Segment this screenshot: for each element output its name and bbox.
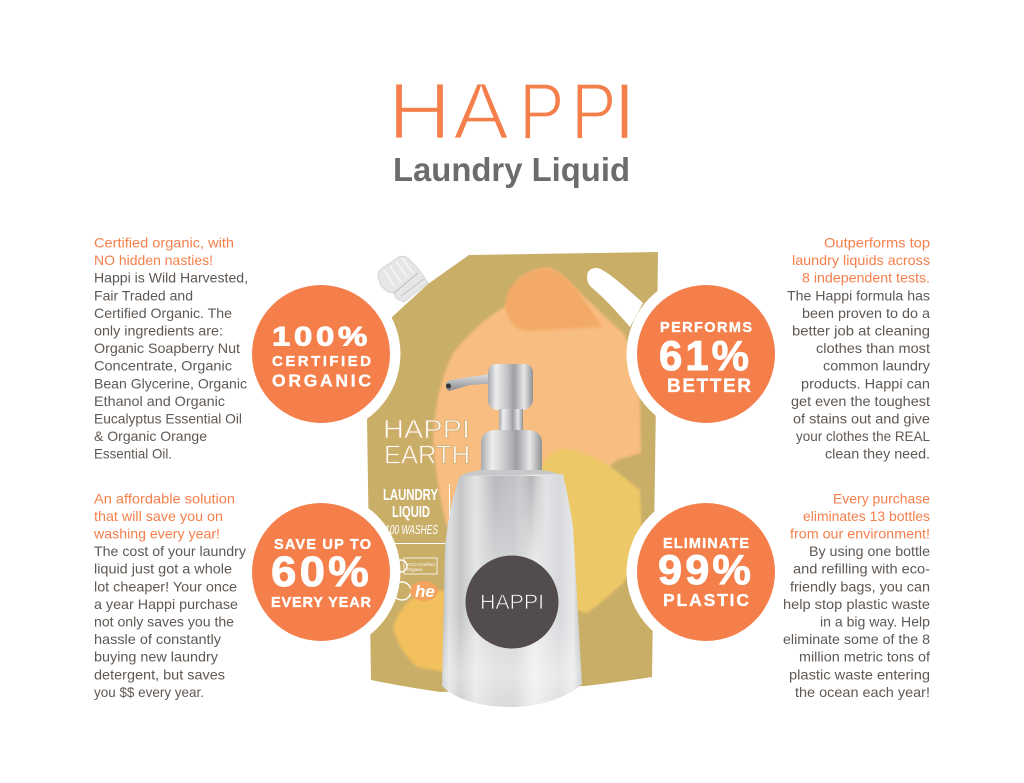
heading (792, 236, 930, 286)
certification badges: he (415, 582, 435, 601)
body: hassle of constantly (94, 632, 221, 647)
body: better job at cleaning (792, 324, 930, 338)
heading (93, 491, 235, 542)
body: Eucalyptus Essential Oil (94, 412, 242, 426)
orange watercolour shape (433, 268, 641, 540)
heading: Outperforms top (824, 236, 930, 250)
body: help stop plastic waste (783, 597, 930, 612)
body: million metric tons of (799, 650, 930, 665)
badge: eliminate 99% plastic: PLASTIC (663, 590, 749, 610)
body: Organic Soapberry Nut (94, 341, 240, 356)
body: liquid just got a whole (94, 562, 232, 577)
heading: from our environment! (790, 526, 930, 542)
heading: NO hidden nasties! (94, 253, 213, 268)
product image: refill pouch (367, 252, 658, 692)
lower-left yellow shape (393, 590, 445, 672)
body: you $$ every year. (94, 685, 204, 700)
badge: eliminate 99% plastic (626, 492, 786, 652)
title: HAPPI: I (612, 67, 636, 157)
body: clean they need. (825, 447, 930, 462)
infographic canvas (94, 84, 930, 707)
bottle flange (460, 470, 564, 480)
body (94, 271, 248, 462)
badge: save up to 60% every year: SAVE UP TO (274, 537, 371, 553)
pouch cap (378, 256, 428, 302)
bottle highlight (442, 474, 582, 707)
body (787, 288, 930, 462)
body: the ocean each year! (795, 685, 930, 700)
body: a year Happi purchase (94, 597, 238, 612)
pump collar (481, 430, 542, 470)
yellow watercolour shape (540, 449, 642, 613)
heading (94, 236, 234, 268)
dark round label: HAPPI (480, 590, 544, 614)
certification badges: Organic (407, 567, 424, 572)
certification badges: ACO Certified (407, 562, 435, 567)
body (94, 544, 246, 700)
title: HAPPI: H (388, 67, 451, 157)
body: been proven to do a (802, 306, 930, 321)
pouch label: Laundry Liquid 100 washes: 100 WASHES (385, 522, 438, 537)
body: your clothes the REAL (796, 429, 930, 444)
pouch label: Laundry Liquid 100 washes: LIQUID (392, 504, 430, 521)
badge: performs 61% better: PERFORMS (660, 320, 752, 336)
pouch brand: HAPPI EARTH (383, 414, 470, 470)
body: of stains out and give (793, 412, 930, 426)
heading: Every purchase (833, 491, 930, 506)
body (783, 544, 930, 700)
bottle top shading (482, 476, 544, 553)
body: common laundry (823, 359, 930, 374)
body: Concentrate, Organic (94, 359, 232, 374)
body: & Organic Orange (94, 429, 207, 444)
text block: certified organic (94, 236, 248, 462)
title: HAPPI (388, 67, 636, 157)
badge: eliminate 99% plastic: ELIMINATE (663, 536, 749, 552)
body: plastic waste entering (789, 667, 930, 682)
text block: every purchase (783, 491, 930, 700)
heading: An affordable solution (94, 491, 235, 506)
body: buying new laundry (94, 650, 218, 665)
body: The cost of your laundry (94, 544, 246, 559)
body: Ethanol and Organic (94, 394, 225, 409)
pump neck (499, 409, 523, 433)
badge: performs 61% better: BETTER (667, 376, 751, 397)
heading: 8 independent tests. (802, 271, 930, 286)
pouch label: Laundry Liquid 100 washes: LAUNDRY (383, 487, 438, 504)
badge: eliminate 99% plastic: 99% (658, 546, 754, 593)
text block: affordable solution (93, 491, 246, 700)
dark round label (466, 556, 558, 648)
body: lot cheaper! Your once (94, 579, 237, 594)
body: products. Happi can (801, 376, 930, 391)
certification badges (393, 558, 438, 601)
body: Fair Traded and (94, 288, 193, 303)
title: HAPPI: P (519, 67, 564, 157)
badge: performs 61% better: 61% (659, 332, 752, 379)
body: only ingredients are: (94, 324, 223, 338)
badge: 100% certified organic: CERTIFIED (272, 353, 371, 370)
heading: washing every year! (93, 526, 220, 542)
body: in a big way. Help (820, 614, 930, 630)
body: Certified Organic. The (94, 306, 232, 321)
darker orange patch (505, 268, 603, 331)
body: Bean Glycerine, Organic (94, 376, 247, 391)
body: By using one bottle (809, 544, 930, 559)
heading: laundry liquids across (792, 253, 930, 268)
text block: outperforms (787, 236, 930, 462)
body: Happi is Wild Harvested, (94, 271, 248, 286)
badge: 100% certified organic (242, 274, 400, 434)
body: and refilling with eco- (793, 562, 930, 577)
body: clothes than most (816, 341, 930, 356)
pouch brand: HAPPI EARTH: HAPPI (383, 414, 470, 444)
body: detergent, but saves (94, 667, 225, 682)
title: HAPPI: P (571, 67, 616, 157)
heading: Certified organic, with (94, 236, 234, 250)
body: get even the toughest (791, 394, 930, 409)
pouch body (367, 252, 658, 692)
badge: 100% certified organic: ORGANIC (272, 370, 371, 390)
badge: save up to 60% every year: 60% (271, 548, 372, 596)
pump head (488, 364, 533, 410)
body: friendly bags, you can (790, 579, 930, 594)
subtitle: Laundry Liquid: Laundry Liquid (393, 151, 630, 188)
body: The Happi formula has (787, 288, 930, 303)
body: eliminate some of the 8 (783, 632, 930, 647)
title: HAPPI: A (453, 67, 509, 157)
pouch label: Laundry Liquid 100 washes (375, 484, 450, 544)
pump spout (446, 374, 499, 391)
body: not only saves you the (94, 614, 234, 630)
badge: performs 61% better (626, 274, 786, 434)
pouch brand: HAPPI EARTH: EARTH (384, 440, 470, 470)
badge: save up to 60% every year: EVERY YEAR (271, 595, 372, 611)
heading: eliminates 13 bottles (803, 509, 930, 524)
badge: save up to 60% every year (242, 492, 400, 652)
heading: that will save you on (94, 509, 223, 524)
heading (790, 491, 930, 542)
badge: 100% certified organic: 100% (272, 322, 371, 352)
handle cut-out (587, 268, 643, 327)
bottle body (442, 474, 582, 707)
body: Essential Oil. (94, 447, 172, 462)
product image: steel soap dispenser (442, 364, 582, 707)
